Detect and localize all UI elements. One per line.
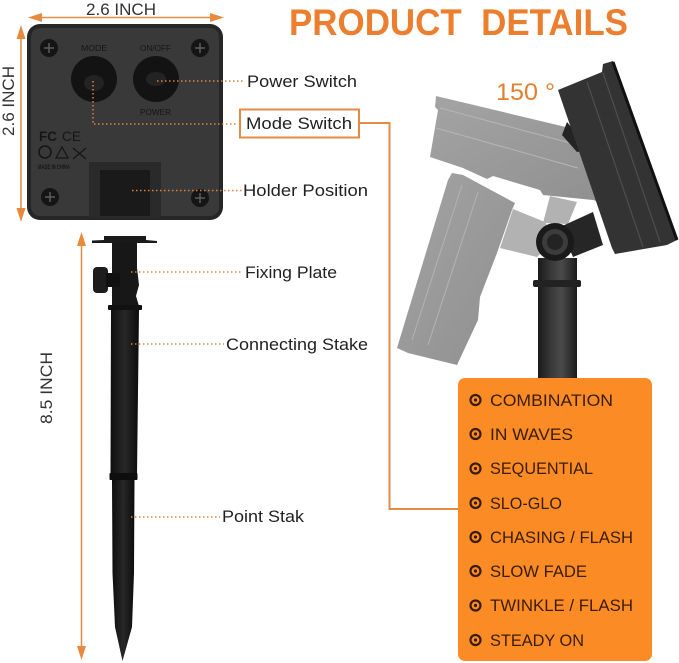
dark arm xyxy=(560,212,603,257)
screw xyxy=(191,189,209,207)
title: PRODUCT DETAILS xyxy=(289,2,628,43)
on/off label: ON/OFF xyxy=(140,43,171,53)
mode: in waves: IN WAVES xyxy=(490,425,573,444)
label: point stak: Point Stak xyxy=(222,507,305,526)
mode: steady on: STEADY ON xyxy=(490,631,584,650)
mode label: MODE xyxy=(81,43,107,53)
label: holder position: Holder Position xyxy=(243,181,368,200)
dotted leader: power switch xyxy=(157,80,245,82)
mode: twinkle / flash: TWINKLE / FLASH xyxy=(490,596,633,615)
connector line to modes panel xyxy=(359,123,458,509)
dimension: height 8.5 inch xyxy=(37,232,86,660)
mode: slow fade: SLOW FADE xyxy=(490,562,587,581)
mode: chasing / flash: CHASING / FLASH xyxy=(490,528,633,547)
dotted leader: point stake xyxy=(131,516,220,518)
screw xyxy=(40,39,58,57)
ground stake xyxy=(92,236,157,661)
dotted leader: connecting stake xyxy=(131,343,224,345)
mode: sequential: SEQUENTIAL xyxy=(490,459,593,478)
dotted leader: holder position xyxy=(132,190,242,192)
label: fixing plate: Fixing Plate xyxy=(245,263,337,282)
power button xyxy=(133,56,179,102)
adjustable head illustration xyxy=(397,61,677,380)
ghost arm xyxy=(500,196,577,257)
pivot knob xyxy=(536,223,574,261)
dark solar panel xyxy=(558,61,677,254)
ghost panel: upper xyxy=(430,96,610,205)
solar box back panel xyxy=(27,24,223,220)
mode: slo-glo: SLO-GLO xyxy=(490,494,562,513)
screw xyxy=(191,39,209,57)
mode: combination: COMBINATION xyxy=(490,391,613,410)
ghost panel: lower xyxy=(397,173,515,365)
dimension: width 2.6 inch: 2.6 INCH xyxy=(86,0,156,19)
dotted leader: mode switch xyxy=(93,81,238,124)
mode switch callout: Mode Switch xyxy=(246,114,352,133)
mode button xyxy=(71,56,117,102)
angle label: 150 ° xyxy=(496,79,555,106)
panel: lighting modes xyxy=(458,378,652,661)
mode switch callout xyxy=(240,110,359,138)
certification marks: CE xyxy=(62,128,81,144)
pole xyxy=(533,258,581,380)
screw xyxy=(41,188,59,206)
dimension: height 2.6 inch xyxy=(0,25,26,222)
label: connecting stake: Connecting Stake xyxy=(226,335,368,354)
certification marks: MADE IN CHINA xyxy=(38,165,70,171)
power label: POWER xyxy=(140,107,171,117)
label: power switch: Power Switch xyxy=(247,72,357,91)
dark panel rear bulge xyxy=(562,122,590,152)
holder slot xyxy=(89,162,161,218)
dotted leader: fixing plate xyxy=(131,271,243,273)
dimension: height 8.5 inch: 8.5 INCH xyxy=(37,352,56,424)
certification marks: FC xyxy=(39,128,57,144)
certification marks xyxy=(38,128,86,171)
dimension: width 2.6 inch xyxy=(28,0,224,22)
